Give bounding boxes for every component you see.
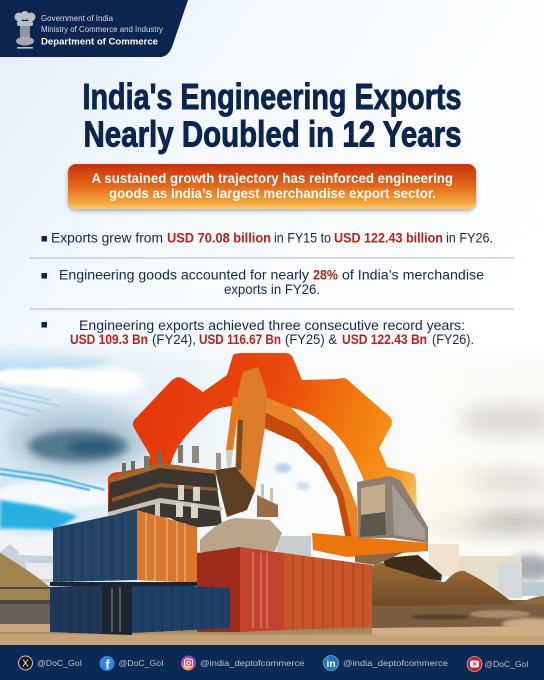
subtitle banner	[68, 164, 476, 209]
department name: Department of Commerce	[41, 36, 158, 46]
subtitle banner: goods as India’s largest merchandise export sector.	[109, 186, 436, 201]
bullet: export growth: in FY15 to	[274, 230, 331, 246]
ground	[0, 553, 544, 646]
bullet: merchandise share: Engineering goods accounted for nearly	[59, 268, 309, 282]
handle: Facebook: @DoC_GoI	[118, 658, 164, 668]
excavator boom	[262, 396, 358, 540]
icon: YouTube	[467, 656, 482, 672]
excavator	[215, 367, 442, 581]
photo scene: construction site with gear, excavator and containers	[0, 340, 544, 646]
gear	[108, 353, 417, 520]
handle: YouTube: @DoC_GoI	[484, 659, 528, 669]
handle: X: @DoC_GoI	[37, 658, 82, 668]
sun glow	[416, 465, 484, 545]
bullet: merchandise share: exports in FY26.	[224, 282, 320, 297]
footer social bar	[0, 645, 544, 680]
bullet: record years: USD 116.67 Bn	[199, 332, 281, 347]
unfinished building under construction	[108, 445, 222, 528]
icon: Facebook	[100, 656, 114, 672]
stacked containers	[50, 510, 230, 635]
icon: X: X	[22, 658, 29, 670]
title: India's Engineering Exports	[82, 76, 462, 117]
excavator bucket	[215, 467, 255, 517]
bullet: record years: Engineering exports achieved three consecutive record years:	[79, 318, 465, 333]
icon: Facebook: f	[105, 657, 110, 672]
bullet: export growth	[42, 230, 493, 246]
bullet: record years: (FY26).	[432, 332, 474, 347]
icon: LinkedIn	[324, 656, 338, 670]
big pipe drum	[200, 518, 282, 552]
red container	[197, 547, 372, 632]
bullet: merchandise share: 28%	[313, 268, 338, 282]
bullet: export growth: USD 70.08 billion	[167, 230, 271, 246]
handle: LinkedIn: @india_deptofcommerce	[343, 658, 448, 668]
bullet: export growth: USD 122.43 billion	[334, 230, 443, 246]
excavator tracks	[383, 555, 442, 581]
bullet: record years: (FY24),	[152, 332, 196, 347]
bullet: merchandise share	[42, 268, 484, 297]
icon: national emblem	[14, 11, 36, 49]
bullet: merchandise share: of India’s merchandise	[342, 268, 484, 282]
subtitle banner: A sustained growth trajectory has reinforced engineering	[92, 171, 453, 186]
bullet: record years: USD 122.43 Bn	[342, 332, 427, 347]
department name: Government of India	[41, 14, 113, 23]
handle: Instagram: @india_deptofcommerce	[200, 658, 305, 668]
header badge	[0, 0, 188, 57]
bullet: record years	[42, 318, 474, 347]
icon: X	[18, 656, 32, 670]
excavator cab	[357, 476, 428, 543]
title	[82, 76, 462, 154]
sky	[0, 340, 544, 610]
bullet: record years: USD 109.3 Bn	[70, 332, 148, 347]
background buildings	[0, 484, 544, 598]
department name: Ministry of Commerce and Industry	[41, 25, 164, 34]
department name	[41, 14, 164, 46]
icon: Instagram	[181, 656, 196, 670]
bullet: record years: (FY25) &	[285, 332, 337, 347]
excavator rear body	[312, 533, 428, 557]
excavator stick	[235, 367, 267, 513]
bullet: export growth: Exports grew from	[51, 230, 163, 246]
title: Nearly Doubled in 12 Years	[84, 114, 462, 154]
icon: LinkedIn: in	[326, 658, 336, 670]
bullet: export growth: in FY26.	[446, 230, 493, 246]
